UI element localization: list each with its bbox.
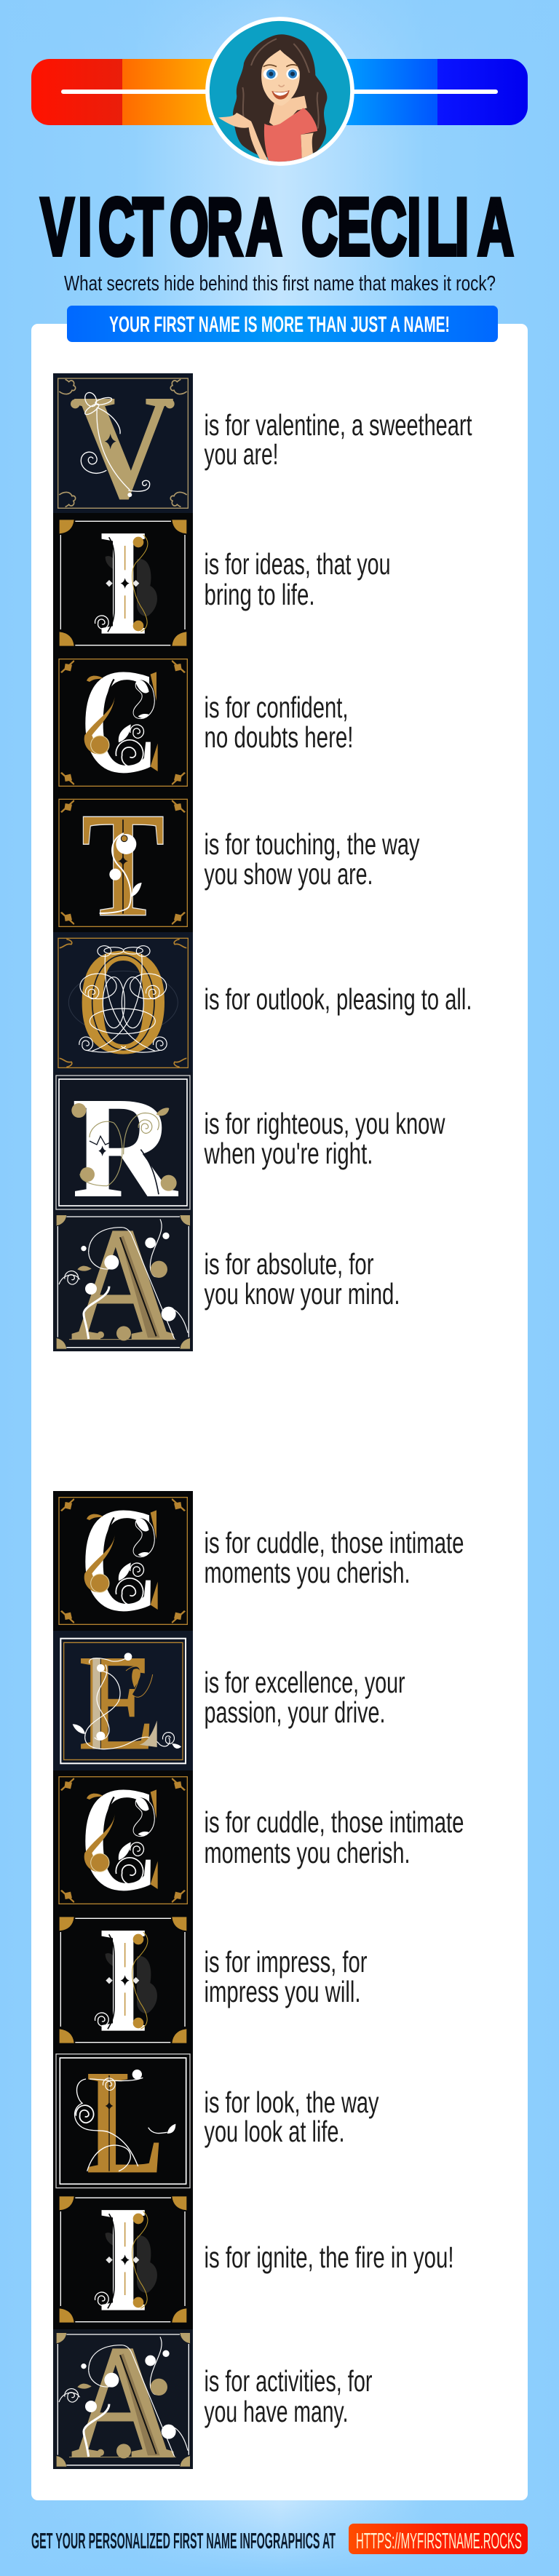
row: I (impress)	[53, 1896, 367, 2064]
text: C line	[204, 691, 354, 754]
text: A line	[204, 1247, 400, 1311]
row: O	[53, 918, 472, 1084]
icon: letter C tile: C	[80, 1755, 159, 1922]
icon: letter L tile: L	[86, 2038, 164, 2205]
text: I line: is for ideas, that you	[204, 547, 390, 581]
text: V line: you are!	[204, 437, 278, 471]
row: A (activities)	[53, 2311, 373, 2494]
text: R line	[204, 1107, 445, 1170]
title: VICTORA CECILIA	[41, 181, 514, 272]
row: C (cuddle)	[53, 1476, 464, 1642]
icon: letter V tile: V	[73, 363, 175, 530]
text: T line: is for touching, the way	[204, 827, 420, 861]
icon: letter I tile	[53, 1896, 193, 2064]
icon: letter I tile	[53, 2175, 193, 2344]
banner: your first name	[67, 306, 498, 342]
icon: letter C tile: C	[80, 637, 159, 804]
icon: letter I tile: I	[97, 1896, 149, 2064]
text: I line	[204, 547, 390, 611]
icon: letter R tile: R	[71, 1068, 179, 1228]
text: R line: when you're right.	[204, 1137, 373, 1170]
text: C line	[204, 1805, 464, 1869]
text: A line	[204, 2364, 373, 2428]
icon: letter E tile	[53, 1626, 193, 1779]
icon: letter A tile: A	[71, 1193, 175, 1376]
panel: letters	[31, 324, 528, 2500]
row: R	[53, 1068, 445, 1228]
row: T	[53, 782, 420, 948]
text: C line: is for cuddle, those intimate	[204, 1526, 464, 1559]
footer url button	[349, 2524, 528, 2554]
text: C line: is for confident,	[204, 691, 348, 724]
text: L line	[204, 2086, 379, 2148]
row: C (cuddle, repeat)	[53, 1755, 464, 1922]
icon: letter I tile	[53, 498, 193, 667]
row: L	[53, 2038, 379, 2205]
icon: letter C tile: C	[80, 1476, 159, 1642]
text: E line: is for excellence, your	[204, 1666, 405, 1699]
text: C line: is for cuddle, those intimate	[204, 1805, 464, 1839]
icon: letter I tile: I	[97, 2175, 149, 2344]
text: C line	[204, 1526, 464, 1589]
text: I line: is for impress, for	[204, 1945, 367, 1979]
icon: letter O tile: O	[77, 918, 170, 1084]
text: C line: moments you cherish.	[204, 1836, 411, 1869]
text: I line: bring to life.	[204, 578, 314, 611]
text: C line: moments you cherish.	[204, 1556, 411, 1589]
text: I line	[204, 1945, 367, 2008]
header banner bar	[31, 59, 528, 125]
icon: letter E tile: E	[79, 1626, 155, 1779]
row: E	[53, 1626, 405, 1779]
text: V line	[204, 408, 472, 471]
text: R line: is for righteous, you know	[204, 1107, 445, 1140]
text: A line: you have many.	[204, 2395, 348, 2428]
text: E line: passion, your drive.	[204, 1696, 386, 1729]
text: A line: is for absolute, for	[204, 1247, 374, 1281]
row: V	[53, 363, 472, 530]
row: I (ignite)	[53, 2175, 454, 2344]
text: L line: you look at life.	[204, 2115, 345, 2148]
row: I	[53, 498, 390, 667]
text: A line: is for activities, for	[204, 2364, 373, 2398]
text: I line: impress you will.	[204, 1975, 361, 2008]
text: T line	[204, 827, 420, 891]
text: I line: is for ignite, the fire in you!	[204, 2241, 454, 2274]
text: A line: you know your mind.	[204, 1277, 400, 1311]
text: C line: no doubts here!	[204, 720, 354, 754]
icon: letter T tile: T	[82, 782, 165, 948]
row: C	[53, 637, 354, 804]
text: L line: is for look, the way	[204, 2086, 379, 2119]
row: A	[53, 1193, 400, 1376]
text: E line	[204, 1666, 405, 1729]
icon: letter A tile: A	[71, 2311, 175, 2494]
icon: avatar portrait	[205, 17, 354, 166]
text: T line: you show you are.	[204, 857, 373, 891]
icon: letter I tile: I	[97, 498, 149, 667]
